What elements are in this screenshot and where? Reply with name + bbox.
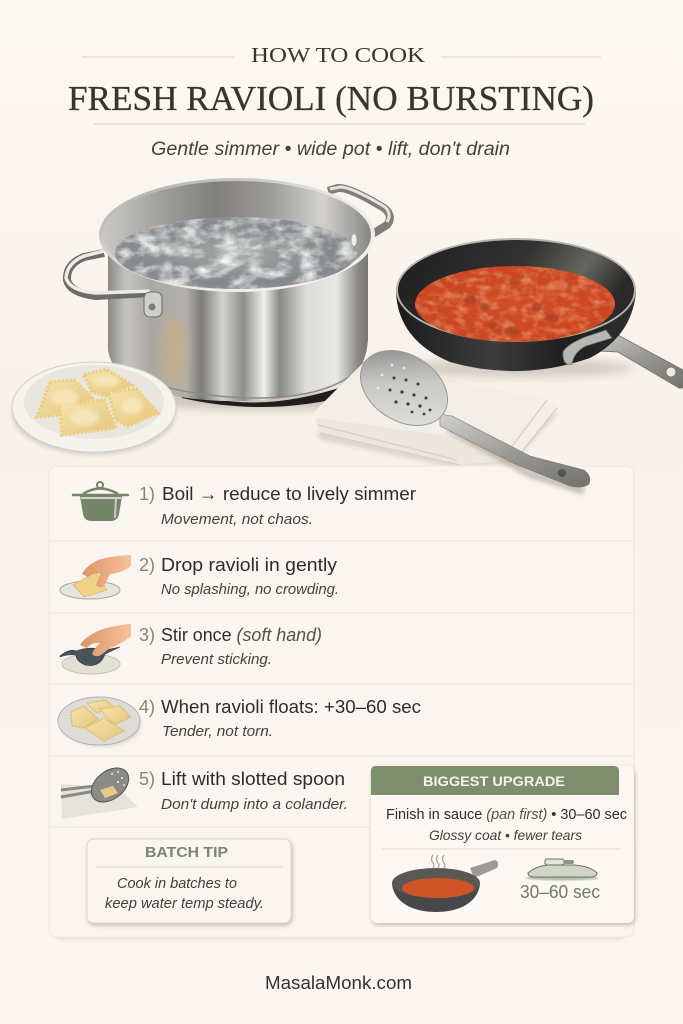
pot of boiling water xyxy=(66,178,390,410)
step 5 heading: Lift with slotted spoon xyxy=(161,769,345,789)
upgrade benefit: Glossy coat • fewer tears xyxy=(429,827,582,843)
icon: pot xyxy=(73,482,128,521)
step 2 heading: Drop ravioli in gently xyxy=(161,555,337,575)
batch tip callout xyxy=(87,839,291,923)
napkin xyxy=(313,362,559,468)
biggest upgrade callout xyxy=(371,766,634,923)
hero illustration: pot, pan, plate, napkin xyxy=(12,178,683,468)
step 3 note: Prevent sticking. xyxy=(161,651,272,668)
step 4 note: Tender, not torn. xyxy=(162,723,273,740)
icon: slotted spoon on cloth xyxy=(61,761,138,819)
step 2 note: No splashing, no crowding. xyxy=(161,581,339,598)
slotted spoon overlapping the card xyxy=(347,335,590,491)
upgrade instruction: Finish in sauce (pan first) • 30–60 sec xyxy=(386,806,627,823)
icon: lid xyxy=(526,859,598,880)
upgrade banner: BIGGEST UPGRADE xyxy=(423,773,565,789)
steps card xyxy=(49,466,634,940)
step 1 heading: Boil → reduce to lively simmer xyxy=(162,484,416,504)
batch tip heading: BATCH TIP xyxy=(145,845,228,861)
sauce xyxy=(413,264,617,344)
title kicker: HOW TO COOK xyxy=(251,43,425,67)
ravioli xyxy=(37,369,158,435)
subtitle: Gentle simmer • wide pot • lift, don't drain xyxy=(151,139,510,160)
step 1 xyxy=(73,482,416,528)
icon: pan with sauce and steam xyxy=(392,855,498,912)
step 1 number: 1) xyxy=(139,484,155,504)
step 5 xyxy=(61,761,348,819)
boiling water xyxy=(115,217,357,289)
lid time label: 30–60 sec xyxy=(520,882,600,902)
icon: hand dropping ravioli xyxy=(60,555,131,599)
batch tip text: Cook in batches to xyxy=(117,875,237,892)
pot rim xyxy=(99,178,375,292)
footer brand: MasalaMonk.com xyxy=(265,973,412,993)
step 4 number: 4) xyxy=(139,697,155,717)
step 5 note: Don't dump into a colander. xyxy=(161,796,348,813)
step 1 note: Movement, not chaos. xyxy=(161,511,313,528)
step 5 number: 5) xyxy=(139,769,155,789)
step 3 heading: Stir once (soft hand) xyxy=(161,625,322,645)
plate of ravioli xyxy=(12,362,176,455)
icon: hand stirring xyxy=(60,624,131,674)
skillet of sauce xyxy=(396,238,683,388)
step 3 xyxy=(60,624,322,674)
step 4 xyxy=(58,697,421,746)
icon: plate of ravioli xyxy=(58,697,140,746)
batch tip text: keep water temp steady. xyxy=(105,895,264,912)
step 2 number: 2) xyxy=(139,555,155,575)
step 3 number: 3) xyxy=(139,625,155,645)
step 2 xyxy=(60,555,339,599)
right handle xyxy=(328,188,390,238)
upgrade banner xyxy=(371,766,619,795)
title block xyxy=(68,43,601,160)
main title: FRESH RAVIOLI (NO BURSTING) xyxy=(68,79,594,118)
batch tip text xyxy=(105,875,264,912)
left handle xyxy=(67,253,150,296)
step 4 heading: When ravioli floats: +30–60 sec xyxy=(161,697,421,717)
